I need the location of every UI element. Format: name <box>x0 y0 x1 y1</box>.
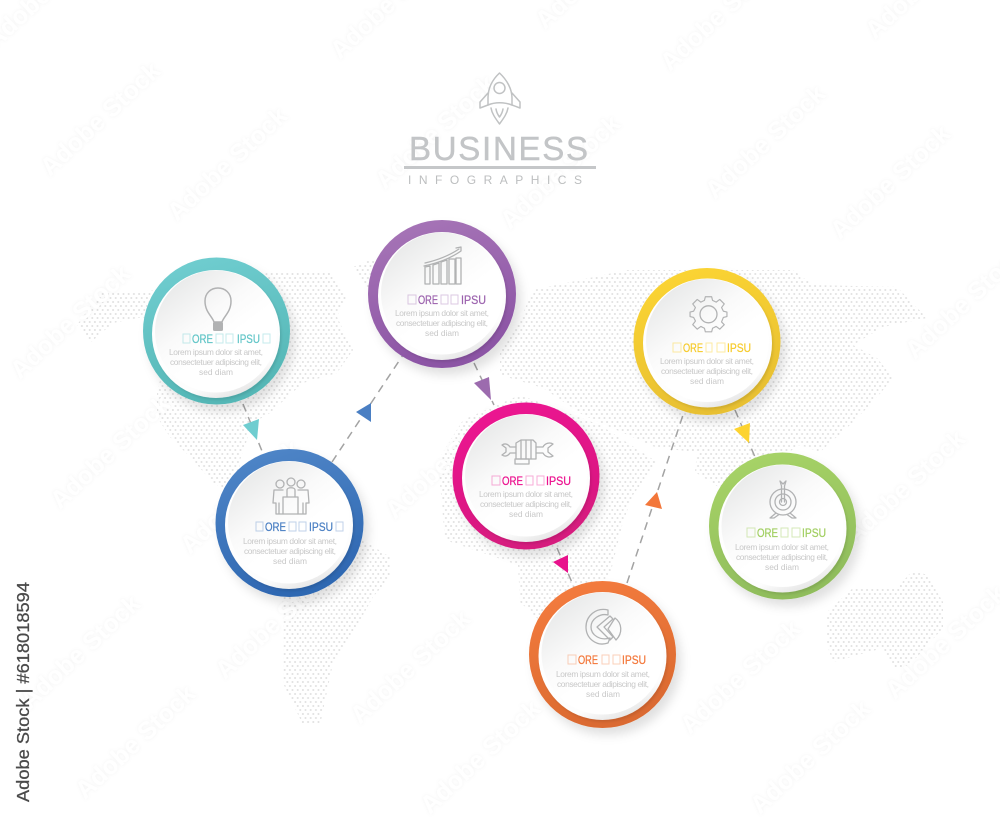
body text <box>735 542 829 572</box>
arrow: blue to purple <box>332 355 403 462</box>
body text <box>556 669 650 699</box>
body text <box>395 308 489 338</box>
body text <box>479 489 573 519</box>
heading: IPSU <box>727 341 751 355</box>
stock watermarks: Adobe Stock <box>840 425 971 549</box>
icon: team <box>273 478 309 514</box>
heading: ORE <box>265 520 286 534</box>
body text: sed diam <box>586 689 620 699</box>
stock watermarks: Adobe Stock <box>210 560 341 684</box>
body text: consectetuer adipiscing elit, <box>736 552 828 562</box>
map: australia <box>827 570 943 668</box>
panel: yellow step <box>634 268 780 415</box>
body text: Lorem ipsum dolor sit amet, <box>395 308 489 318</box>
heading <box>492 474 571 488</box>
icon: wrench and fist <box>502 440 553 464</box>
map: alaska and north america <box>77 273 353 495</box>
stock watermarks: Adobe Stock <box>45 390 176 514</box>
heading: IPSU <box>461 293 486 307</box>
panel: pink step <box>452 402 600 550</box>
heading: IPSU <box>237 332 260 346</box>
arrow: yellow to green <box>734 410 755 457</box>
heading: ORE <box>418 293 438 307</box>
arrow: orange to yellow <box>627 412 684 583</box>
stock watermarks: Adobe Stock <box>495 110 626 234</box>
heading: ORE <box>578 653 598 667</box>
body text: consectetuer adipiscing elit, <box>557 679 649 689</box>
body text: consectetuer adipiscing elit, <box>170 357 262 367</box>
stock watermarks: Adobe Stock <box>162 102 293 226</box>
heading: IPSU <box>546 474 571 488</box>
stock watermarks: Adobe Stock <box>15 590 146 714</box>
heading <box>256 520 343 534</box>
stock watermarks: Adobe Stock <box>745 695 876 817</box>
arrow: pink to orange <box>553 548 574 587</box>
body text: Lorem ipsum dolor sit amet, <box>479 489 573 499</box>
body text: Lorem ipsum dolor sit amet, <box>735 542 829 552</box>
map: south america <box>265 540 390 725</box>
body text: Lorem ipsum dolor sit amet, <box>660 356 754 366</box>
heading <box>183 332 270 346</box>
icon: target <box>770 481 796 518</box>
icon: pie chart <box>586 609 621 644</box>
panel: green step <box>709 452 856 600</box>
body text: sed diam <box>509 509 543 519</box>
icon: light bulb <box>205 288 231 331</box>
title: BUSINESS <box>409 130 588 167</box>
dotted world map <box>77 260 943 725</box>
stock watermarks: Adobe Stock <box>35 57 166 181</box>
panel: orange step <box>529 581 676 728</box>
body text: sed diam <box>425 328 459 338</box>
panel: purple step <box>368 220 516 368</box>
heading <box>408 293 486 307</box>
body text: sed diam <box>765 562 799 572</box>
icon: rocket <box>480 73 520 124</box>
body text: consectetuer adipiscing elit, <box>480 499 572 509</box>
heading: ORE <box>502 474 523 488</box>
title: INFOGRAPHICS <box>408 173 582 187</box>
title <box>404 130 596 187</box>
stock credit: Adobe Stock | #618018594 <box>13 582 33 802</box>
icon: bar chart <box>424 247 461 284</box>
heading <box>568 653 646 667</box>
heading: IPSU <box>802 526 826 540</box>
stock watermarks: Adobe Stock <box>5 260 136 384</box>
arrow: purple to pink <box>474 363 494 405</box>
stock watermarks: Adobe Stock <box>675 615 806 739</box>
stock watermarks: Adobe Stock <box>415 695 546 817</box>
body text: sed diam <box>199 367 233 377</box>
body text: Lorem ipsum dolor sit amet, <box>556 669 650 679</box>
heading: ORE <box>757 526 778 540</box>
stock watermarks: Adobe Stock <box>345 605 476 729</box>
heading <box>673 341 751 355</box>
body text: sed diam <box>690 376 724 386</box>
stock watermarks: Adobe Stock <box>825 120 956 244</box>
body text <box>243 536 337 566</box>
body text: consectetuer adipiscing elit, <box>244 546 336 556</box>
body text: sed diam <box>273 556 307 566</box>
map: africa <box>438 395 657 640</box>
panel: teal step <box>143 258 290 404</box>
map: greenland <box>353 260 420 345</box>
panel: blue step <box>216 449 364 597</box>
stock watermarks: Adobe Stock <box>380 400 511 524</box>
heading: IPSU <box>622 653 646 667</box>
stock watermarks: Adobe Stock <box>700 80 831 204</box>
body text: Lorem ipsum dolor sit amet, <box>243 536 337 546</box>
body text <box>660 356 754 386</box>
arrow: teal to blue <box>243 404 264 456</box>
icon: gear <box>690 297 727 332</box>
heading: IPSU <box>309 520 333 534</box>
stock watermarks: Adobe Stock <box>370 70 501 194</box>
body text: consectetuer adipiscing elit, <box>661 366 753 376</box>
heading: ORE <box>192 332 213 346</box>
map: eurasia <box>500 270 927 488</box>
body text: Lorem ipsum dolor sit amet, <box>169 347 263 357</box>
stock watermarks: Adobe Stock <box>70 680 201 804</box>
body text <box>169 347 263 377</box>
heading: ORE <box>683 341 703 355</box>
stock watermarks: Adobe Stock <box>175 435 306 559</box>
heading <box>747 526 826 540</box>
body text: consectetuer adipiscing elit, <box>396 318 488 328</box>
